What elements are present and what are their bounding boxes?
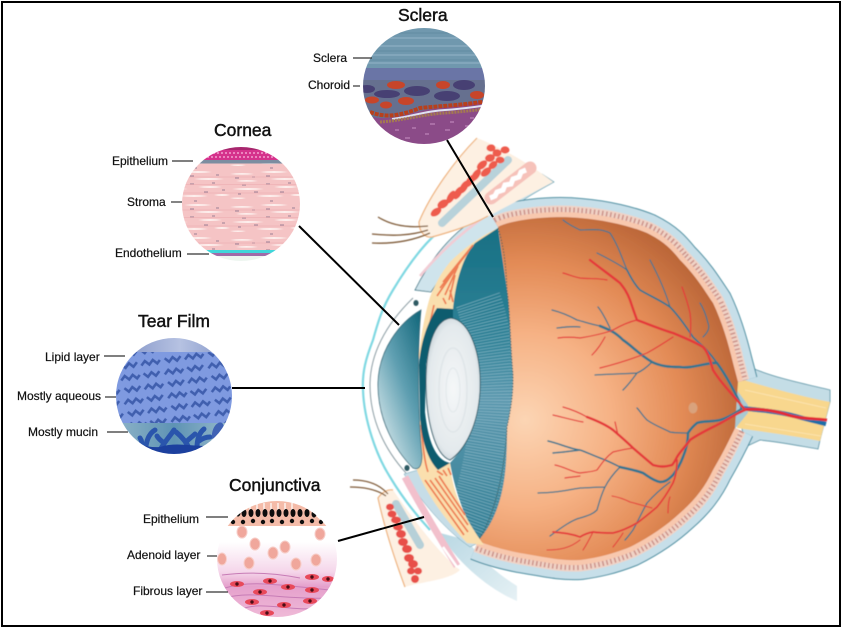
nerve fibres — [737, 378, 830, 441]
macula — [688, 402, 698, 414]
label: sclera layer — [313, 51, 372, 65]
lower lashes — [350, 480, 388, 496]
lower ciliary muscle — [417, 420, 484, 545]
label: mostly mucin: Mostly mucin — [28, 425, 98, 439]
corneal outline — [370, 298, 413, 473]
connector: conjunctiva — [338, 517, 424, 541]
choroid speckles — [478, 217, 738, 560]
retinal pigment band — [478, 217, 738, 560]
eye cross-section — [350, 138, 830, 601]
lower canal of Schlemm — [404, 465, 410, 471]
lower conjunctiva strip — [405, 477, 457, 566]
lower eyelid — [350, 477, 460, 587]
arteries (red) — [547, 260, 745, 550]
optic nerve — [728, 368, 830, 449]
zonule striations — [466, 300, 494, 530]
sclera magnified circle — [363, 28, 485, 144]
label: choroid: Choroid — [308, 78, 350, 92]
lower white gland — [443, 547, 457, 567]
label: fibrous layer: Fibrous layer — [133, 584, 202, 598]
connector: tear film — [232, 387, 365, 389]
lid body — [419, 138, 553, 237]
lamina at the disc — [728, 385, 748, 430]
label: corneal epithelium — [112, 154, 193, 168]
lid outline — [419, 138, 488, 237]
label: corneal epithelium: Epithelium — [112, 154, 168, 168]
label: lipid layer — [45, 350, 125, 364]
central retinal vein in nerve — [740, 408, 826, 424]
nerve sheath — [735, 368, 830, 449]
sclera band outer edge — [478, 217, 738, 560]
pink bar — [491, 168, 530, 198]
lower rectus muscle tail — [440, 533, 517, 601]
connector: cornea — [299, 226, 399, 325]
panel: cornea — [112, 120, 302, 264]
anterior chamber — [378, 310, 422, 469]
conjunctiva title: Conjunctiva — [229, 475, 321, 495]
sclera band — [478, 217, 738, 560]
panel: conjunctiva — [127, 475, 339, 620]
panel: sclera — [308, 5, 490, 150]
tarsal bar — [442, 160, 508, 223]
upper lashes — [372, 217, 430, 243]
upper limbal sclera — [415, 206, 502, 292]
choroid band — [478, 217, 738, 560]
lower glands — [386, 504, 422, 583]
lower tarsal bar — [396, 504, 420, 545]
panel: tear film — [17, 311, 236, 458]
tear film title: Tear Film — [138, 311, 210, 331]
label: sclera layer: Sclera — [313, 51, 347, 65]
retina — [478, 217, 738, 560]
lens — [426, 318, 480, 460]
conjunctiva magnified circle — [215, 500, 339, 620]
label: mostly aqueous: Mostly aqueous — [17, 389, 101, 403]
connector: sclera — [447, 140, 493, 217]
central retinal artery in nerve — [740, 409, 827, 420]
label: stroma: Stroma — [127, 195, 166, 209]
cyan tear film line over the cornea — [363, 208, 490, 530]
label: conjunctival epithelium — [143, 512, 228, 526]
tarsal glands — [429, 144, 510, 218]
cornea title: Cornea — [214, 120, 272, 140]
tear film magnified circle — [116, 338, 232, 454]
upper rectus muscle tail — [498, 174, 554, 215]
iris — [419, 308, 453, 470]
ciliary body and zonules — [450, 228, 513, 541]
upper conjunctiva strip — [420, 208, 497, 276]
lower lid body — [378, 490, 460, 587]
cornea magnified circle — [180, 145, 302, 264]
upper eyelid — [372, 138, 553, 243]
canal of Schlemm — [413, 300, 419, 306]
veins (blue) — [538, 220, 742, 540]
white gland — [490, 170, 526, 198]
sclera title: Sclera — [398, 5, 448, 25]
lower limbal sclera — [404, 470, 482, 547]
upper ciliary muscle — [418, 228, 498, 363]
scalloped retinal edge — [478, 228, 513, 541]
label: endothelium: Endothelium — [115, 246, 182, 260]
lower lid outline — [378, 490, 405, 587]
label: lipid layer: Lipid layer — [45, 350, 100, 364]
label: adenoid layer: Adenoid layer — [127, 548, 200, 562]
label: conjunctival epithelium: Epithelium — [143, 512, 199, 526]
